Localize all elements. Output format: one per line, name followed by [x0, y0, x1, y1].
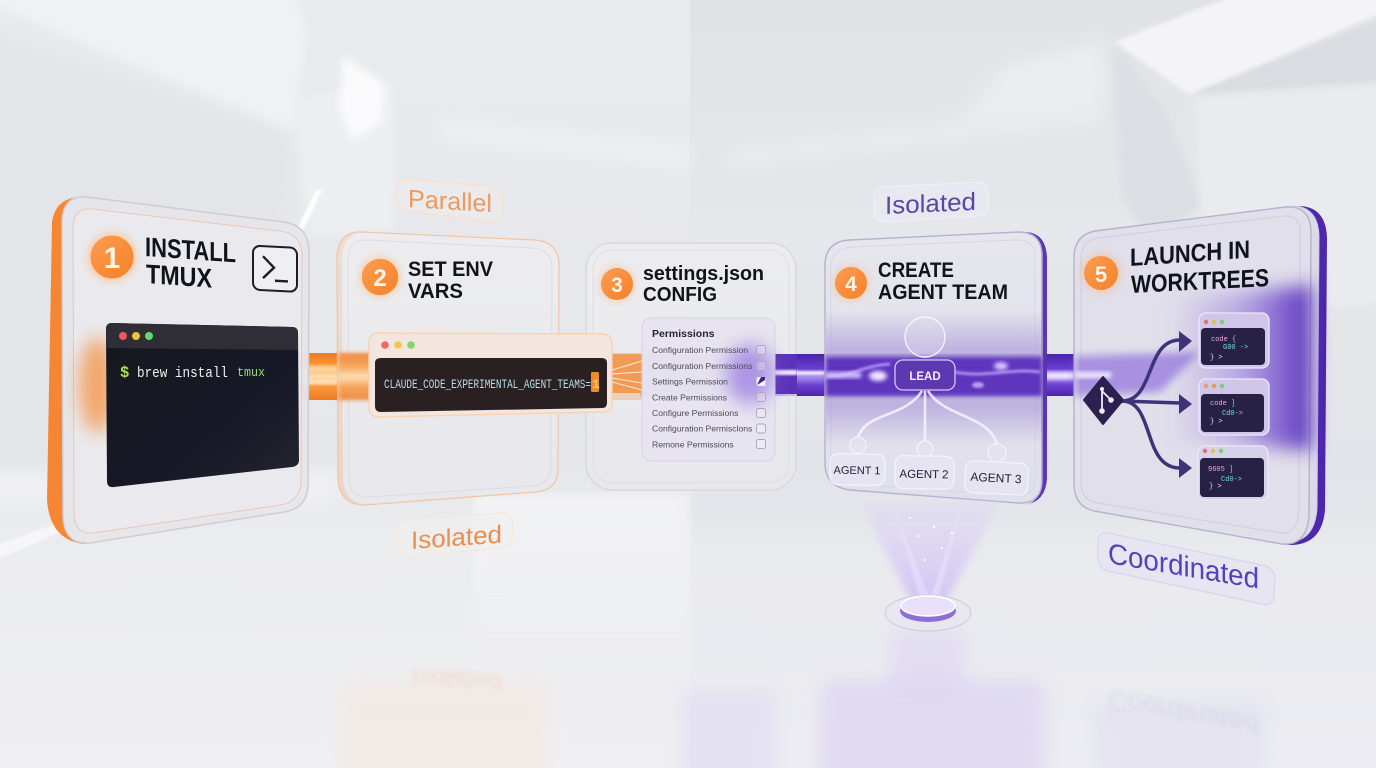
badge 4 — [833, 265, 869, 301]
agent 3 — [964, 460, 1029, 496]
permissions panel: Settings Permission — [652, 376, 728, 386]
icon: terminal prompt — [253, 246, 297, 292]
panel: step 2 set env vars — [337, 232, 559, 505]
card glass — [825, 232, 1042, 503]
heading: TMUX — [146, 259, 212, 294]
floor reflections: Coordinated — [1108, 683, 1259, 740]
terminal window: brew install — [137, 365, 228, 382]
panel: step 3 settings.json config — [586, 243, 797, 490]
arrow heads — [1179, 331, 1192, 478]
card inner outline — [831, 240, 1035, 496]
floor reflections: Isolated — [411, 662, 502, 696]
beam glow through card — [338, 353, 378, 400]
energy beam: purple segment — [640, 354, 1100, 396]
worktree window 1: G00 -> — [1223, 344, 1248, 352]
floor reflections — [340, 630, 1265, 768]
heading — [1130, 236, 1269, 299]
permissions panel: Configure Permissions — [652, 408, 738, 418]
badge 1 — [87, 232, 137, 282]
card edge: orange — [337, 232, 365, 505]
tag: Parallel: Parallel — [408, 185, 492, 218]
card edge: purple — [1282, 206, 1327, 545]
worktree window 3: } > — [1209, 483, 1222, 491]
tag: Isolated purple — [874, 182, 988, 222]
heading — [643, 262, 764, 306]
agent 1 — [830, 454, 885, 485]
heading: WORKTREES — [1131, 264, 1269, 299]
beam stub orange inside card — [610, 354, 644, 393]
badge 3: 3 — [611, 274, 623, 297]
agent nodes — [850, 437, 1006, 462]
card glass — [337, 232, 559, 505]
beam stub purple inside card — [770, 354, 797, 394]
back glass layer — [1282, 206, 1319, 544]
badge 3 — [599, 266, 635, 302]
heading: INSTALL — [145, 232, 236, 268]
heading: CONFIG — [643, 283, 717, 306]
lead box — [895, 360, 955, 390]
worktree window 1: code { — [1211, 336, 1236, 344]
heading: AGENT TEAM — [878, 280, 1008, 304]
tag: Coordinated: Coordinated — [1108, 538, 1259, 596]
purple glow — [726, 344, 774, 404]
hologram projector — [860, 503, 1000, 631]
heading: LAUNCH IN — [1130, 236, 1250, 272]
card inner outline — [593, 250, 789, 483]
agent 3: AGENT 3 — [970, 470, 1022, 486]
heading: CREATE — [878, 258, 954, 282]
agent 2: AGENT 2 — [899, 469, 949, 481]
lead box: LEAD — [909, 371, 941, 383]
badge 5: 5 — [1095, 262, 1107, 287]
icon: git diamond — [1084, 377, 1123, 424]
card glass — [586, 243, 796, 490]
badge 4: 4 — [845, 273, 857, 296]
permissions panel — [642, 318, 775, 461]
permissions panel: Configuration Permissions — [652, 361, 752, 371]
worktree window 2: code ] — [1210, 400, 1235, 408]
permissions panel: Permissions — [652, 328, 715, 340]
terminal window — [106, 323, 299, 487]
branch arrows — [1122, 340, 1180, 468]
projector disk — [885, 595, 971, 631]
panel: step 5 launch in worktrees — [1074, 206, 1327, 545]
badge 1: 1 — [104, 242, 120, 275]
heading: SET ENV — [408, 257, 494, 281]
worktree window 3: Cd0-> — [1221, 476, 1242, 484]
env var window: CLAUDE_CODE_EXPERIMENTAL_AGENT_TEAMS= — [384, 378, 591, 392]
tag: Isolated orange: Isolated — [411, 521, 502, 555]
card edge: orange — [47, 197, 90, 544]
worktree window 2: } > — [1210, 418, 1223, 426]
permissions panel: Create Permissions — [652, 392, 727, 402]
purple glow — [1170, 285, 1312, 450]
heading: settings.json — [643, 262, 764, 285]
env var window — [369, 333, 612, 417]
env var window: 1 — [592, 377, 600, 392]
worktree window 3: 9605 ] — [1208, 466, 1233, 474]
badge 5 — [1081, 253, 1121, 293]
worktree window 3 — [1198, 446, 1268, 500]
beam through card — [826, 357, 1042, 396]
band glow — [826, 310, 1042, 445]
card inner outline — [348, 240, 552, 497]
badge 2 — [359, 256, 401, 298]
worktree window 2: Cd0-> — [1222, 410, 1243, 418]
agent 2 — [895, 455, 954, 490]
tag: Parallel — [397, 179, 503, 221]
heading — [878, 258, 1008, 304]
panel: step 4 create agent team — [825, 232, 1047, 505]
tag: Isolated orange — [398, 513, 513, 556]
card edge: purple — [1024, 232, 1047, 505]
lead avatar — [905, 317, 945, 357]
energy beam: orange segment — [298, 353, 643, 400]
heading — [145, 232, 236, 294]
tag: Isolated purple: Isolated — [885, 188, 976, 220]
card inner outline — [1081, 216, 1300, 533]
worktree window 2 — [1199, 379, 1269, 435]
permissions panel: Configuration Permission — [652, 345, 748, 355]
terminal window: $ — [120, 364, 129, 382]
card inner outline — [73, 209, 302, 533]
agent 1: AGENT 1 — [833, 465, 881, 477]
heading: VARS — [408, 279, 463, 303]
worktree window 1: } > — [1210, 354, 1223, 362]
heading — [408, 257, 494, 303]
light cone — [860, 503, 1000, 602]
terminal window: tmux — [237, 365, 265, 380]
card glass — [62, 197, 309, 543]
badge 2: 2 — [373, 265, 387, 292]
tree connectors — [858, 391, 997, 445]
permissions panel: Configuration Permisclons — [652, 424, 752, 434]
card glass — [1074, 207, 1311, 544]
panel: step 1 install tmux — [47, 197, 309, 544]
worktree window 1 — [1199, 313, 1269, 368]
orange glow — [79, 337, 115, 433]
permissions panel: Remone Permissions — [652, 440, 734, 450]
